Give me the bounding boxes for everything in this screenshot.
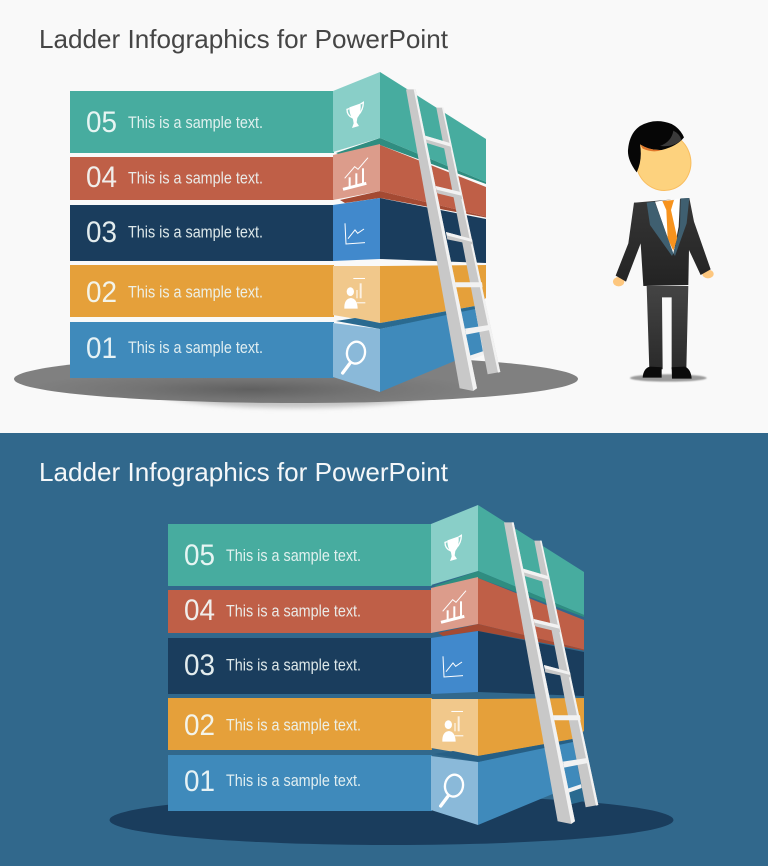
figure ground shadow	[630, 374, 707, 382]
band 02: 02	[86, 276, 117, 309]
band 02	[168, 698, 584, 756]
trousers	[647, 286, 688, 369]
top title: Ladder Infographics for PowerPoint	[39, 24, 449, 54]
band 01: This is a sample text.	[128, 339, 263, 357]
band 03: 03	[86, 216, 117, 249]
bottom ground shadow	[110, 795, 674, 845]
band 03: 03	[184, 649, 215, 682]
band 02: 02	[184, 709, 215, 742]
bottom ladder stack	[168, 505, 598, 825]
hair	[628, 121, 684, 172]
head	[628, 125, 699, 198]
band 04: 04	[86, 161, 117, 194]
band 04: 04	[184, 594, 215, 627]
band 03: This is a sample text.	[128, 224, 263, 242]
top ladder stack	[70, 72, 500, 392]
band 05: This is a sample text.	[226, 547, 361, 565]
top panel background	[0, 0, 768, 433]
shoes	[643, 367, 692, 379]
band 03	[70, 198, 486, 263]
hands	[613, 270, 714, 286]
band 03: This is a sample text.	[226, 656, 361, 674]
band 04	[168, 577, 584, 650]
band 04	[70, 144, 486, 218]
band 05: This is a sample text.	[128, 114, 263, 132]
band 05	[70, 72, 486, 184]
businessman figure	[613, 121, 714, 382]
tie	[662, 200, 677, 251]
band 02	[70, 265, 486, 323]
shirt	[655, 198, 680, 254]
band 01: 01	[86, 332, 117, 365]
band 05: 05	[184, 539, 215, 572]
ladder	[406, 89, 500, 391]
band 02: This is a sample text.	[128, 284, 263, 302]
band 01: This is a sample text.	[226, 772, 361, 790]
band 01	[168, 739, 584, 825]
band 01	[70, 306, 483, 392]
top ground shadow	[14, 355, 578, 408]
band 04: This is a sample text.	[128, 170, 263, 188]
band 04: This is a sample text.	[226, 602, 361, 620]
ladder	[504, 522, 598, 824]
band 03	[168, 631, 584, 696]
band 05: 05	[86, 106, 117, 139]
bottom panel background	[0, 433, 768, 866]
bottom title: Ladder Infographics for PowerPoint	[39, 457, 449, 487]
lapels	[647, 198, 689, 256]
band 05	[168, 505, 584, 617]
band 01: 01	[184, 765, 215, 798]
band 02: This is a sample text.	[226, 716, 361, 734]
jacket	[616, 198, 711, 286]
